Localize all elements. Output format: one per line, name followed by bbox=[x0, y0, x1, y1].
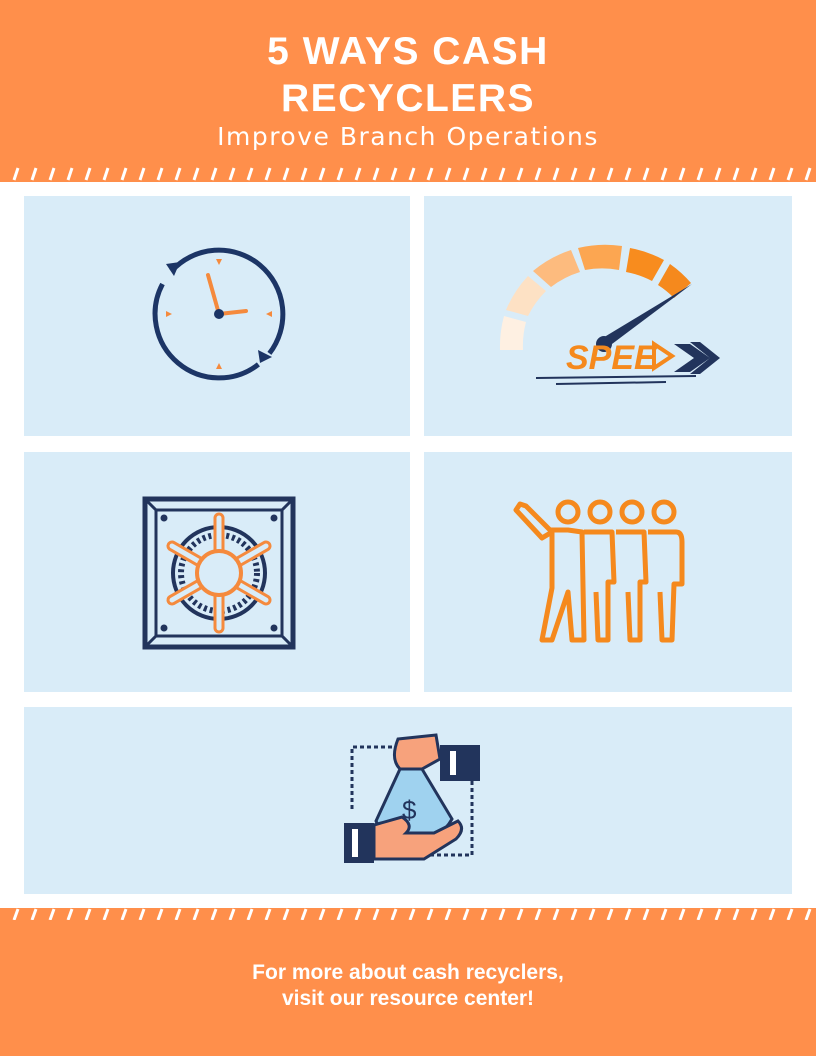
title bbox=[267, 30, 549, 120]
panel: speed bbox=[424, 196, 792, 436]
panel: money bbox=[24, 707, 792, 894]
icon: vault bbox=[142, 496, 296, 650]
icon: team bbox=[513, 500, 684, 642]
footer band bbox=[0, 908, 816, 1056]
panel: clock bbox=[24, 196, 410, 436]
icon: money exchange: $ bbox=[402, 795, 417, 825]
icon: speedometer: SPEE bbox=[566, 339, 658, 377]
header band bbox=[0, 0, 816, 182]
footer text bbox=[252, 961, 564, 1010]
title: RECYCLERS bbox=[281, 77, 535, 120]
footer text: For more about cash recyclers, bbox=[252, 961, 564, 984]
footer text: visit our resource center! bbox=[282, 987, 534, 1010]
icon: money exchange bbox=[344, 733, 480, 863]
panel: team bbox=[424, 452, 792, 692]
subtitle: Improve Branch Operations bbox=[217, 122, 599, 151]
icon: clock bbox=[152, 248, 286, 380]
icon: speedometer bbox=[500, 244, 720, 385]
panel: vault bbox=[24, 452, 410, 692]
title: 5 WAYS CASH bbox=[267, 30, 549, 73]
